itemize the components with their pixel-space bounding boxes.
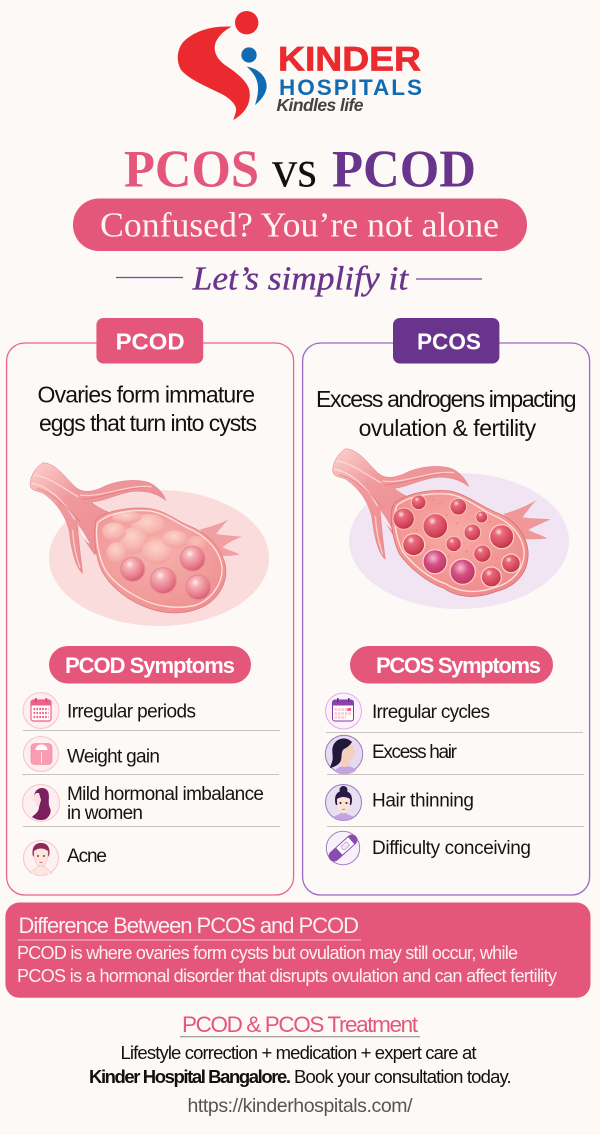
- symptom: irregular cycles: Irregular cycles: [372, 702, 490, 723]
- difference explanation: PCOS is a hormonal disorder that disrupts ovulation and can affect fertility: [17, 966, 557, 986]
- PCOD description: Ovaries form immature: [38, 381, 255, 407]
- PCOS symptoms heading: [350, 646, 553, 684]
- difference explanation: PCOD is where ovaries form cysts but ovulation may still occur, while: [17, 943, 518, 963]
- icon: weighing scale: [24, 736, 58, 772]
- icon: woman profile with long hair: [325, 735, 363, 774]
- PCOS description: ovulation & fertility: [359, 415, 537, 441]
- PCOD ovary illustration: [30, 463, 269, 626]
- icon: purple calendar: [326, 693, 362, 729]
- symptom dividers: [22, 730, 280, 826]
- logo: Kinder Hospitals: Kindles life: [276, 95, 364, 115]
- treatment heading: PCOD & PCOS Treatment: [182, 1012, 419, 1037]
- PCOS ovary illustration: [333, 449, 569, 609]
- difference heading: Difference Between PCOS and PCOD: [18, 913, 359, 938]
- symptom: hair thinning: Hair thinning: [372, 791, 474, 812]
- PCOD description: eggs that turn into cysts: [39, 410, 257, 436]
- symptom: mild hormonal imbalance: Mild hormonal imbalance: [67, 784, 264, 805]
- PCOS label: [393, 318, 499, 364]
- PCOD label: [96, 318, 203, 364]
- subtitle pill: Confused? You’re not alone: [100, 206, 499, 245]
- treatment text: Lifestyle correction + medication + expert care at: [120, 1042, 476, 1063]
- PCOD label: PCOD: [116, 328, 185, 354]
- title: vs: [272, 141, 317, 199]
- PCOS symptoms heading: PCOS Symptoms: [376, 653, 541, 678]
- PCOD symptoms heading: [49, 646, 251, 684]
- icon: woman silhouette: [22, 784, 60, 822]
- title: [124, 141, 476, 199]
- PCOS label: PCOS: [417, 328, 481, 354]
- PCOD description: [38, 381, 257, 436]
- logo: Kinder Hospitals: HOSPITALS: [279, 75, 422, 100]
- icon: calendar: [23, 692, 59, 728]
- PCOS description: [316, 386, 576, 441]
- symptom: irregular periods: Irregular periods: [67, 702, 196, 723]
- title: PCOD: [332, 141, 476, 199]
- PCOS description: Excess androgens impacting: [316, 386, 576, 412]
- panel: PCOD: [7, 318, 294, 895]
- PCOD symptoms heading: PCOD Symptoms: [65, 653, 235, 678]
- symptom: acne: Acne: [67, 846, 107, 867]
- symptom: mild hormonal imbalance: in women: [67, 803, 143, 824]
- website url: https://kinderhospitals.com/: [188, 1095, 413, 1117]
- difference explanation: [17, 943, 557, 986]
- symptom: difficulty conceiving: Difficulty conceiving: [372, 838, 531, 859]
- treatment text: Book your consultation today.: [294, 1066, 512, 1087]
- icon: pregnancy test stick: [326, 831, 360, 865]
- logo: Kinder Hospitals: [178, 11, 422, 120]
- tagline: Let’s simplify it: [192, 260, 410, 297]
- treatment text: Kinder Hospital Bangalore.: [89, 1066, 291, 1087]
- icon: woman with thinning hair: [326, 784, 362, 820]
- symptom: mild hormonal imbalance: [67, 784, 264, 824]
- symptom: weight gain: Weight gain: [67, 747, 160, 768]
- symptom: excess hair: Excess hair: [372, 742, 458, 763]
- treatment text: [89, 1042, 512, 1087]
- panel: PCOS: [303, 318, 590, 895]
- subtitle pill: [73, 198, 527, 251]
- logo: Kinder Hospitals: KINDER: [278, 41, 421, 79]
- icon: face with acne: [24, 840, 58, 876]
- title: PCOS: [124, 141, 259, 199]
- panel: difference between PCOS and PCOD: [5, 902, 590, 998]
- symptom dividers: [326, 732, 584, 826]
